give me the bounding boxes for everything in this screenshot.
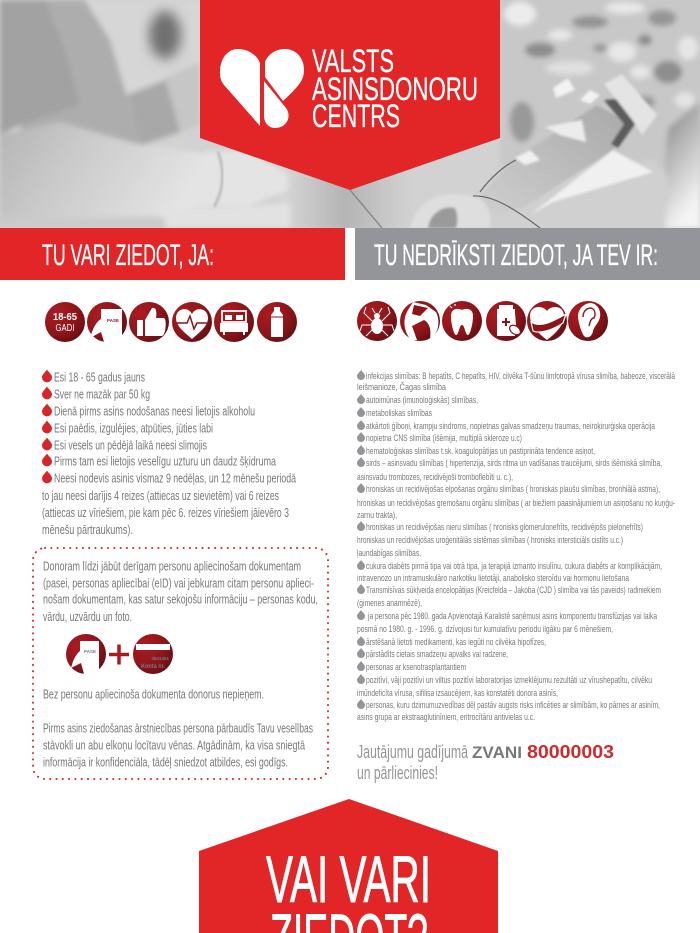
- contraindications text: [357, 371, 675, 723]
- contraindications text: leišmanioze, Čagas slimība: [357, 382, 447, 393]
- icon: passport: PASE: [107, 318, 119, 323]
- conditions text: Esi 18 - 65 gadus jauns: [54, 370, 145, 384]
- conditions text: Esi vesels un pēdējā laikā neesi slimojis: [54, 438, 207, 452]
- identification and confidentiality text: Bez personu apliecinoša dokumenta donorus nepieņem.: [43, 688, 264, 702]
- background photo: blood donation: [0, 0, 700, 232]
- icon: age 18-65: 18-65: [53, 312, 77, 323]
- logo banner: [200, 0, 500, 190]
- grey drop bullets: [357, 370, 365, 709]
- icon row: cannot donate: [357, 301, 608, 341]
- contraindications text: autoimūnas (imunoloģiskās) slimības,: [366, 395, 478, 406]
- bottom badge: can you donate: [199, 799, 498, 933]
- identification and confidentiality text: [43, 688, 313, 770]
- call to action: phone number: 80000003: [527, 742, 614, 762]
- identification and confidentiality text: informācija ir konfidenciāla, tādēļ sniedzot atbildes, esi godīgs.: [43, 756, 288, 770]
- contraindications text: (ģimenes anamnēzē),: [357, 598, 422, 609]
- icon: age 18-65: GADI: [56, 323, 74, 334]
- contraindications text: pārstādīts cietais smadzeņu apvalks vai radzene,: [366, 649, 508, 660]
- call to action: phone number: [357, 742, 614, 783]
- contraindications text: nopietna CNS slimība (išēmija, multiplā skleroze u.c): [366, 433, 522, 444]
- call to action: phone number: un pārliecinies!: [357, 763, 438, 783]
- contraindications text: hematoloģiskas slimības t.sk. koagulopātijas un pastiprināta tendence asiņot,: [366, 446, 595, 457]
- icon: bank card: [133, 634, 173, 674]
- icon: passport: [87, 302, 127, 342]
- document requirement text: [43, 560, 318, 624]
- list: donation conditions: [42, 370, 296, 537]
- document requirement text: (pasei, personas apliecībai (eID) vai jebkuram citam personu aplieci-: [43, 576, 314, 590]
- icon: bank card: 4841351: [151, 656, 169, 661]
- icon: bed: [214, 302, 254, 342]
- contraindications text: zarnu trakta),: [357, 510, 397, 521]
- list: contraindications: [357, 370, 675, 723]
- document requirement text: nošam dokumentam, kas satur sekojošu informāciju – personas kodu,: [43, 592, 318, 606]
- conditions text: [42, 370, 296, 537]
- contraindications text: personas ar ksenotrasplantantiem: [366, 662, 466, 673]
- contraindications text: asinsvadu trombozes, recidivējoši tromboflebīti u. c.),: [357, 472, 513, 483]
- icon: bottle: [257, 302, 297, 342]
- call to action: phone number: Jautājumu gadījumā: [357, 742, 469, 762]
- logo wordmark: VALSTS: [312, 43, 394, 79]
- bottom badge: can you donate: VAI VARI: [266, 842, 431, 916]
- document requirement text: Donoram līdzi jābūt derīgam personu apliecinošam dokumentam: [43, 560, 301, 574]
- logo wordmark: [312, 43, 478, 134]
- logo wordmark: CENTRS: [312, 98, 400, 134]
- icon: passport: PASE: [84, 649, 96, 654]
- conditions text: Pirms tam esi lietojis veselīgu uzturu un daudz šķidruma: [54, 454, 276, 468]
- conditions text: mēnešu pārtraukums).: [42, 523, 133, 537]
- contraindications text: ļaundabīgas slimības,: [357, 548, 421, 559]
- contraindications text: imūndeficīta vīrusa, sifilisa izsaucējiem, kas konstatēti donora asinīs,: [357, 688, 558, 699]
- logo wordmark: ASINSDONORU: [312, 71, 478, 107]
- heading band: cannot donate: [355, 228, 700, 280]
- logo heart icon: [220, 49, 304, 128]
- icon: bank card: Konta nr.: [141, 664, 165, 670]
- icon: body with neck: [400, 301, 440, 341]
- icon: tick: [357, 301, 397, 341]
- call to action: phone number: ZVANI: [472, 743, 522, 762]
- conditions text: Sver ne mazāk par 50 kg: [54, 388, 150, 402]
- dotted panel: identity document: [33, 548, 328, 779]
- conditions text: Esi paēdis, izgulējies, atpūties, jūties labi: [54, 422, 213, 436]
- conditions text: Dienā pirms asins nodošanas neesi lietojis alkoholu: [54, 404, 255, 418]
- icon: passport: [66, 634, 106, 674]
- document requirement text: vārdu, uzvārdu un foto.: [43, 610, 132, 624]
- identification and confidentiality text: stāvokli un abu elkoņu locītavu vēnas. Atgādinām, ka visa sniegtā: [43, 738, 305, 752]
- plus sign: [109, 644, 129, 664]
- conditions text: Neesi nodevis asinis vismaz 9 nedēļas, un 12 mēnešu periodā: [54, 472, 296, 486]
- icon: thumbs up: [129, 302, 169, 342]
- conditions text: (attiecas uz vīriešiem, pie kam pēc 6. reizes vīriešiem jāievēro 3: [42, 506, 289, 520]
- icon row: can donate: [45, 302, 297, 342]
- identification and confidentiality text: Pirms asins ziedošanas ārstniecības persona pārbaudīs Tavu veselības: [43, 722, 313, 736]
- heading band: can donate: TU VARI ZIEDOT, JA:: [42, 239, 214, 272]
- icon: heart with pulse: [172, 302, 212, 342]
- icon: medicine: [486, 301, 526, 341]
- heading band: can donate: [0, 228, 345, 280]
- contraindications text: ārstēšanā lietoti medikamenti, kas iegūti no cilvēka hipofīzes,: [366, 637, 546, 648]
- contraindications text: asins grupa ar ekstraaglutinīniem, eritrocītāru antivielas u.c.: [357, 712, 535, 723]
- icon: heart with ribbon: [527, 301, 567, 341]
- blood drop bullets: [42, 370, 52, 483]
- contraindications text: metaboliskas slimības: [366, 408, 432, 419]
- conditions text: to jau neesi darījis 4 reizes (attiecas uz sievietēm) vai 6 reizes: [42, 489, 279, 503]
- icon: tooth: [442, 301, 482, 341]
- icon: age 18-65: [45, 302, 85, 342]
- icon: ear: [568, 301, 608, 341]
